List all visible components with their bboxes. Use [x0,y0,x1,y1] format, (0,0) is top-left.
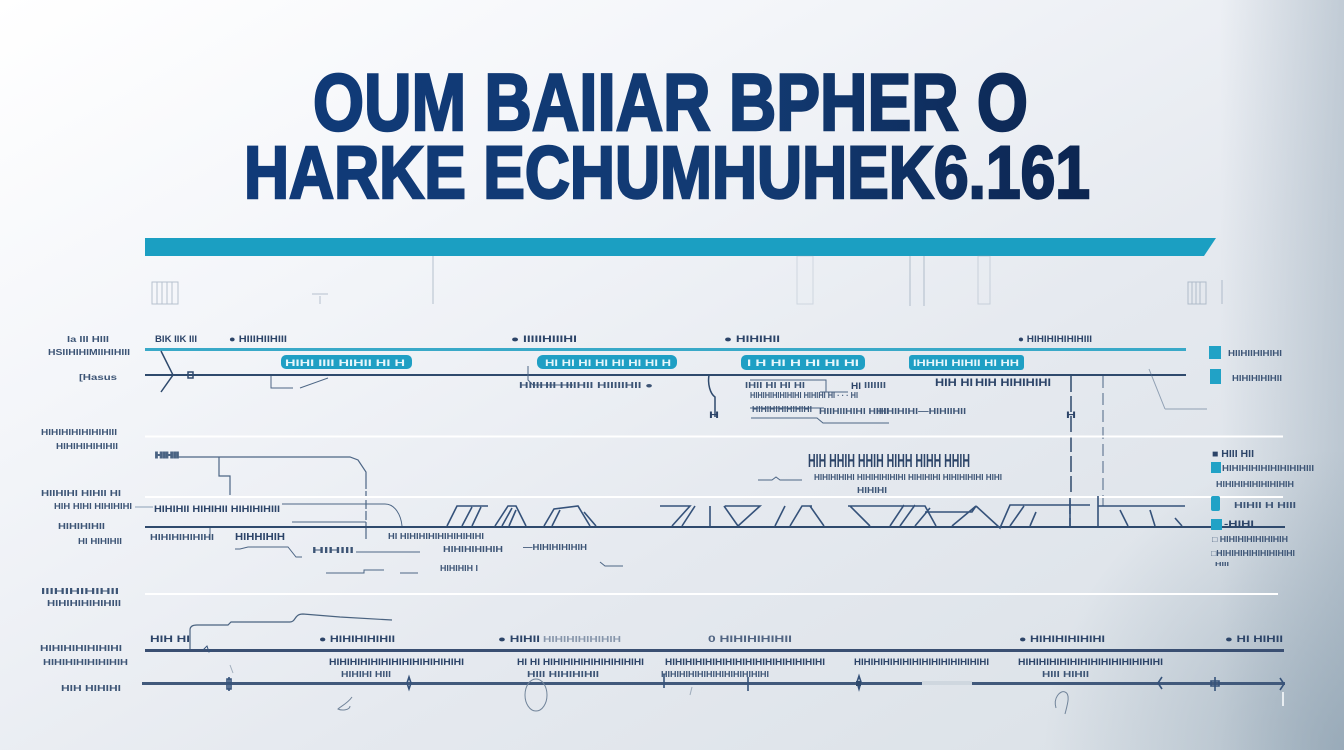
row one milestone headings [155,334,1092,344]
legend: lower right: HIHIHIHIHIHIHIHIHIII [1222,464,1314,473]
dark rule [145,374,1186,376]
hand circles [230,665,1068,714]
row one notes: HIHIHIHIHIHIHI HIHIHI HI · · · HI [750,391,858,400]
row two small notes: HI HIHIHIHIHIHIHIHIHI [388,532,484,541]
row one notes: HIIIHII HIIHII HIIIIIHII ● [519,381,653,390]
row one notes: IIIIIII [864,381,886,390]
white separators [145,436,1283,595]
legend: lower right: HIHII H HIII [1234,501,1296,510]
row one labels [48,335,130,382]
row three labels: HIHIHIHIHIHIHIH [43,658,128,667]
legend: top right: HIHIHIHIHII [1232,374,1282,383]
row one notes: IHII HI HI HI [745,381,805,390]
row three notes: HIII HIHIHIHII [527,670,599,679]
row one notes: HIH HI [935,377,973,389]
row one notes: H [709,410,719,420]
truss bridge [145,496,1285,528]
row two labels [41,428,132,546]
truss members [447,496,1185,528]
legend: lower right: -HIHI [1224,519,1254,529]
row two stepped connectors [135,451,402,540]
row three milestone headings: ● HIHII [498,634,540,644]
row three notes: HIHIHIHIHIHIHIHIHIHIHIHIHIHIHIHI [665,657,825,667]
row two small notes: HIHIHIHIHIHI [150,533,214,542]
teal pills: HIHI IIII HIHII HI H [285,358,405,368]
row three milestone headings: ● HIHIHIHIHIHI [1019,634,1105,644]
teal pills: HI HI HI HI HI HI HI H [545,358,671,368]
row three milestone headings: HIH HI [150,634,190,644]
row two labels: HIIHIHI HIHII HI [41,489,121,498]
row two small notes: HIHIHIHIHIH [443,545,503,554]
title [244,58,1090,214]
lower chord [145,526,1285,528]
row three notes: HIHIHIHIHIHIHIHIHIHIHIHIHIHI [854,657,989,667]
legend: top right: HIIHIIHIHIHI [1228,349,1282,358]
row one labels: Ia III HIII [67,335,109,344]
row one: timeline [48,334,1207,526]
row two small notes: —HIHIHIHIHIH [523,543,587,552]
row three notes: HIHIHI HIII [341,670,391,679]
row one milestone headings: BIK IIK III [155,334,197,344]
row one labels: HSIIHIHIMIIHIHIII [48,348,130,357]
legend: lower right: □ HIHIHIHIHIHIHIH [1212,535,1288,544]
row three: timeline [40,587,1285,714]
row two small notes: HIHIHIH I [440,564,478,573]
legend: lower right: HIHIHIHIHIHIHIHIH [1216,480,1294,489]
row two labels: HIHIHIHIHIHII [56,442,118,451]
row three milestone headings: ● HIHIHIHIHII [319,634,395,644]
lower dark rule with markers [142,646,1285,706]
connector strokes [161,351,1207,526]
row one notes: HIHIHIHIHIHIHI [752,405,812,414]
faint drop markers under header bar [152,256,1222,306]
row two small notes [150,504,623,573]
row one notes: HIH HIHIHIHI [975,377,1051,389]
teal rule [145,348,1186,351]
title: OUM BAIIAR BPHER O [313,58,1028,148]
row one notes: H [1066,410,1076,420]
row two labels: HIH HIHI HIHIHIHI [54,502,132,511]
row three notes: HI HI HIHIHIHIHIHIHIHIHIHI [517,657,644,667]
row two central heading: HIHIHI [857,486,887,495]
row three labels: HIHIHIHIHIHIII [47,599,121,608]
row two labels: HIHIHIHIHIHIHIII [41,428,117,437]
row one notes: HI [851,381,861,391]
row three milestone headings: ● HI HIHII [1225,634,1283,644]
title: HARKE ECHUMHUHEK6.161 [244,131,1090,214]
row three notes [329,657,1163,679]
header teal bar [145,238,1216,256]
row three notes: HIHIHIHIHIHIHIHIHIHIHIHIHIHI [1018,657,1163,667]
legend: lower right: HIII [1215,562,1230,568]
row two small notes: HIHIII [312,546,354,555]
legend: lower right: □HIHIHIHIHIHIHIHIHI [1211,549,1295,558]
stepped curve [190,614,392,650]
row two central heading: HIHIHIHIHI HIHIHIHIHIHI HIHIHIHI HIHIHIHIHI HIHI [814,473,1002,482]
row one labels: [Hasus [79,373,118,382]
teal pills [281,355,1024,370]
row one notes: HIHIHIHI—HIHIIHII [876,407,966,416]
row two small notes: HIHHIHIH [235,532,285,543]
row one milestone headings: ● IIIIIHIIIHI [511,334,577,344]
row one milestone headings: ● HIIIHIIHIII [229,334,287,344]
legend: lower right: ■ HIII HII [1212,449,1254,460]
row three labels: IIIHIHIHIHII [41,587,119,596]
row two stepped connectors: HIHII [155,451,179,460]
row one milestone headings: ● HIHIHII [724,334,780,344]
row three notes: HIII HIHII [1042,670,1089,679]
row three milestone headings: HIHIHIHIHIHIH [543,635,621,644]
row one milestone headings: ● HIHIHIHIHIHIII [1018,334,1092,344]
row two central heading [758,451,1002,495]
row one notes [519,377,1076,420]
row three labels: HIH HIHIHI [61,684,121,693]
row three milestone headings [150,634,1283,644]
upper dark rule [145,649,1284,652]
legend: lower right [1211,449,1314,568]
row two small notes: HIHIHII HIHIHII HIHIHIHIII [154,504,280,514]
teal pills: I H HI H HI HI HI [747,358,859,368]
row three milestone headings: 0 HIHIHIHIHII [708,634,792,644]
row three labels [40,587,128,693]
legend: top right [1209,346,1282,384]
row three labels: HIHIHIHIHIHIHI [40,644,122,653]
row two labels: HIHIHIHII [58,522,105,531]
row three notes: HIHIHIHIHIHIHIHIHIHIHIHIHI [329,657,464,667]
row one notes: HIIHIIHIHI HIHI [819,407,889,416]
teal pills: IHHHI HIHII HI HH [913,358,1019,368]
row two central heading: HIH HHIH HHIH HIHH HIHH HHIH [808,451,970,471]
row two labels: HI HIHIHII [78,537,122,546]
row three notes: HIHIHIHIHIHIHIHIHIHIHIHI [661,670,769,679]
